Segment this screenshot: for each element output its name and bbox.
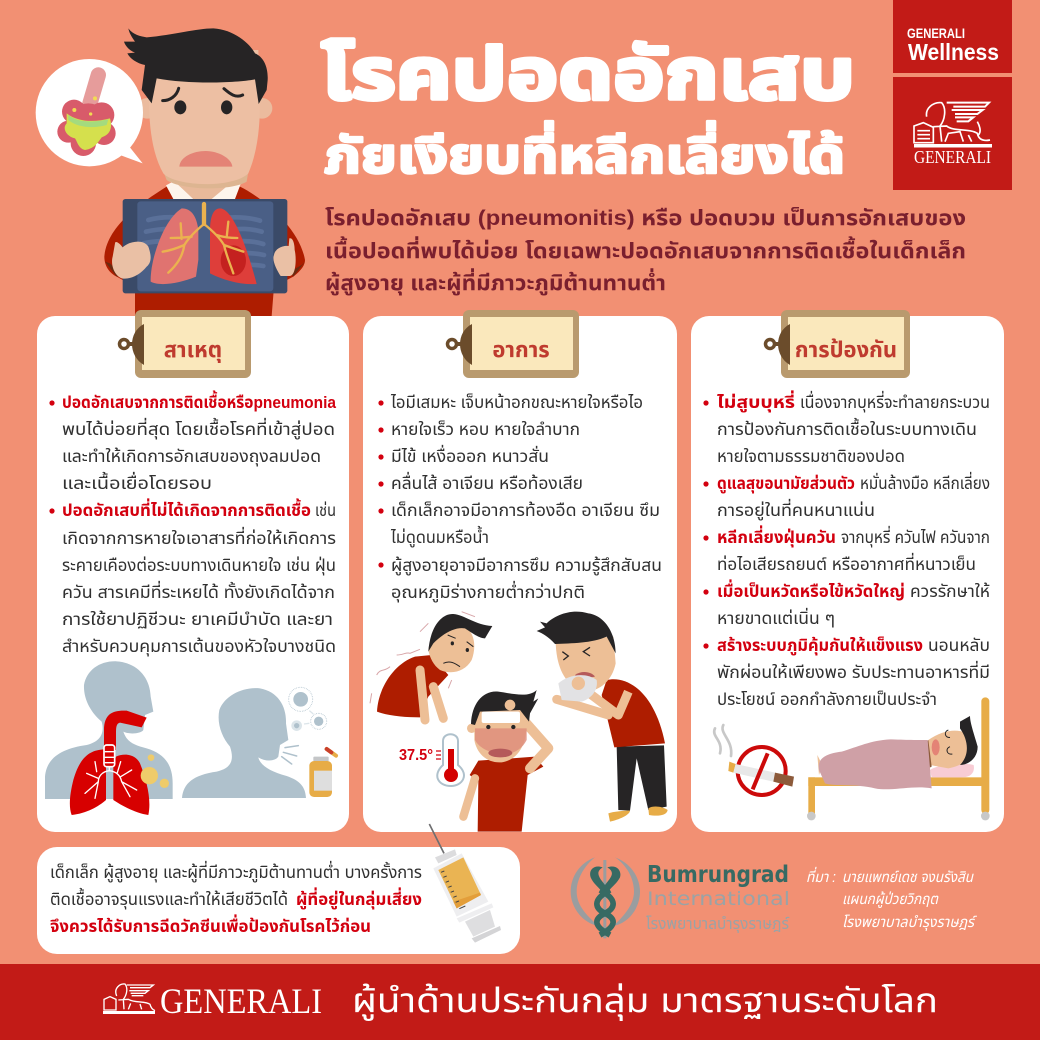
heading tag: prevention: การป้องกัน: [795, 337, 897, 362]
text: prevention list: สร้างระบบภูมิคุ้มกันให้แข็งแรง: [717, 635, 923, 656]
callout: vaccine advice: ติดเชื้ออาจรุนแรงและทำให้เสียชีวิตได้: [50, 887, 288, 910]
text: prevention list: นอนหลับ: [928, 636, 990, 655]
logo: Generali Wellness: Wellness: [908, 39, 999, 65]
text: source credit: แผนกผู้ป่วยวิกฤต: [842, 891, 939, 908]
illustration: thermometer 37.5: 37.5°: [399, 747, 433, 764]
title: [321, 35, 855, 184]
text: source credit: ที่มา :: [806, 866, 836, 886]
logo: Generali lion: GENERALI: [914, 147, 991, 167]
text: symptoms list: มีไข้ เหงื่อออก หนาวสั่น: [391, 444, 549, 466]
text: prevention list: การอยู่ในที่คนหนาแน่น: [717, 498, 875, 522]
text: causes list: การใช้ยาปฏิชีวนะ ยาเคมีบำบัด และยา: [62, 609, 333, 629]
illustration: child with fever: [463, 690, 548, 832]
panel: symptoms: [363, 310, 677, 832]
logo: Generali Wellness: [893, 0, 1012, 73]
callout: vaccine advice: จึงควรได้รับการฉีดวัคซีนเพื่อป้องกันโรคไว้ก่อน: [50, 914, 371, 936]
text: prevention list: [703, 390, 990, 709]
panel: causes: [37, 310, 349, 832]
text: prevention list: หลีกเลี่ยงฝุ่นควัน: [717, 525, 836, 548]
illustration: shivering man: [370, 612, 492, 720]
logo: Bumrungrad International: International: [647, 888, 790, 910]
text: causes list: ปอดอักเสบจากการติดเชื้อหรือpneumonia: [62, 390, 336, 412]
illustration: body silhouette with lungs: [45, 661, 173, 815]
text: causes list: และทำให้เกิดการอักเสบของถุงลมปอด: [62, 446, 321, 467]
alveolus shape: [57, 100, 116, 156]
title: ภัยเงียบที่หลีกเลี่ยงได้: [324, 121, 845, 184]
footer banner: [0, 964, 1040, 1040]
text: prevention list: เมื่อเป็นหวัดหรือไข้หวัดใหญ่: [717, 579, 905, 601]
intro paragraph: [325, 207, 966, 296]
intro paragraph: เนื้อปอดที่พบได้บ่อย โดยเฉพาะปอดอักเสบจากการติดเชื้อในเด็กเล็ก: [325, 236, 966, 263]
illustration: thermometer 37.5: [399, 734, 464, 786]
callout: vaccine advice: ผู้ที่อยู่ในกลุ่มเสี่ยง: [296, 887, 422, 910]
speech bubble: infected alveolus: [36, 59, 143, 166]
text: symptoms list: ผู้สูงอายุอาจมีอาการซึม ความรู้สึกสับสน: [391, 555, 662, 577]
text: prevention list: หายขาดแต่เนิ่น ๆ: [717, 607, 835, 628]
icon: no smoking: [714, 725, 794, 795]
callout: vaccine advice: [37, 847, 520, 954]
text: causes list: สำหรับควบคุมการเต้นของหัวใจบางชนิด: [62, 636, 336, 657]
illustration: man coughing into tissue: [537, 612, 668, 822]
text: symptoms list: หายใจเร็ว หอบ หายใจลำบาก: [391, 420, 580, 439]
text: prevention list: ประโยชน์ ออกกำลังกายเป็นประจำ: [717, 690, 937, 709]
text: prevention list: หายใจตามธรรมชาติของปอด: [717, 447, 905, 466]
footer banner: ผู้นำด้านประกันกลุ่ม มาตรฐานระดับโลก: [352, 982, 938, 1021]
text: source credit: โรงพยาบาลบำรุงราษฎร์: [842, 914, 978, 931]
intro paragraph: ผู้สูงอายุ และผู้ที่มีภาวะภูมิต้านทานต่ำ: [325, 268, 666, 296]
title: โรคปอดอักเสบ: [321, 35, 855, 115]
logo: Generali Wellness: GENERALI: [907, 25, 965, 41]
logo: footer Generali lion: [103, 984, 155, 1014]
heading tag: causes: สาเหตุ: [164, 337, 222, 363]
text: prevention list: การป้องกันการติดเชื้อในระบบทางเดิน: [717, 417, 977, 439]
text: symptoms list: ไม่ดูดนมหรือน้ำ: [390, 525, 489, 549]
text: prevention list: เนื่องจากบุหรี่จะทำลายกระบวน: [800, 390, 990, 413]
footer banner: GENERALI: [160, 981, 322, 1021]
text: causes list: และเนื้อเยื่อโดยรอบ: [62, 471, 212, 493]
text: symptoms list: [378, 392, 662, 604]
text: causes list: [49, 390, 336, 657]
heading tag: prevention: [766, 310, 910, 378]
intro paragraph: โรคปอดอักเสบ (pneumonitis) หรือ ปอดบวม เป็นการอักเสบของ: [325, 207, 966, 230]
logo: Bumrungrad International: [571, 857, 790, 938]
heading tag: symptoms: อาการ: [492, 337, 550, 362]
callout: vaccine advice: เด็กเล็ก ผู้สูงอายุ และผู้ที่มีภาวะภูมิต้านทานต่ำ บางครั้งการ: [50, 860, 422, 884]
illustration: coughing silhouette with virus and medicine: [182, 687, 336, 798]
logo: Bumrungrad International: Bumrungrad: [647, 862, 789, 888]
illustration: worried man holding chest x-ray: [104, 28, 305, 316]
text: source credit: [806, 866, 978, 931]
text: source credit: นายแพทย์เดช จงนรังสิน: [842, 869, 974, 886]
text: prevention list: ควรรักษาให้: [910, 581, 990, 601]
icon: syringe: [429, 824, 501, 943]
text: prevention list: ไม่สูบบุหรี่: [717, 390, 795, 413]
text: symptoms list: ไอมีเสมหะ เจ็บหน้าอกขณะหายใจหรือไอ: [390, 392, 643, 412]
heading tag: causes: [120, 310, 251, 378]
heading tag: symptoms: [448, 310, 579, 378]
x-ray film: [123, 199, 287, 293]
text: causes list: เช่น: [315, 501, 336, 520]
logo: Bumrungrad International: โรงพยาบาลบำรุงราษฎร์: [646, 916, 790, 933]
text: prevention list: หมั่นล้างมือ หลีกเลี่ยง: [860, 471, 990, 493]
text: symptoms list: เด็กเล็กอาจมีอาการท้องอืด อาเจียน ซึม: [391, 500, 660, 520]
text: prevention list: ดูแลสุขอนามัยส่วนตัว: [717, 473, 855, 494]
text: causes list: พบได้บ่อยที่สุด โดยเชื้อโรคที่เข้าสู่ปอด: [62, 417, 335, 441]
text: prevention list: จากบุหรี่ ควันไฟ ควันจาก: [841, 525, 990, 548]
text: prevention list: ท่อไอเสียรถยนต์ หรืออากาศที่หนาวเย็น: [717, 552, 976, 574]
panel: prevention: [691, 310, 1004, 832]
text: causes list: ระคายเคืองต่อระบบทางเดินหายใจ เช่น ฝุ่น: [62, 556, 336, 576]
text: prevention list: พักผ่อนให้เพียงพอ รับประทานอาหารที่มี: [717, 660, 990, 682]
text: symptoms list: อุณหภูมิร่างกายต่ำกว่าปกติ: [391, 580, 585, 604]
text: symptoms list: คลื่นไส้ อาเจียน หรือท้องเสีย: [391, 471, 583, 493]
text: causes list: เกิดจากการหายใจเอาสารที่ก่อให้เกิดการ: [62, 526, 336, 548]
logo: Generali lion: [893, 77, 1012, 190]
text: causes list: ปอดอักเสบที่ไม่ได้เกิดจากการติดเชื้อ: [62, 498, 311, 520]
illustration: man resting in bed: [807, 697, 990, 820]
text: causes list: ควัน สารเคมีที่ระเหยได้ ทั้งยังเกิดได้จาก: [62, 580, 335, 602]
